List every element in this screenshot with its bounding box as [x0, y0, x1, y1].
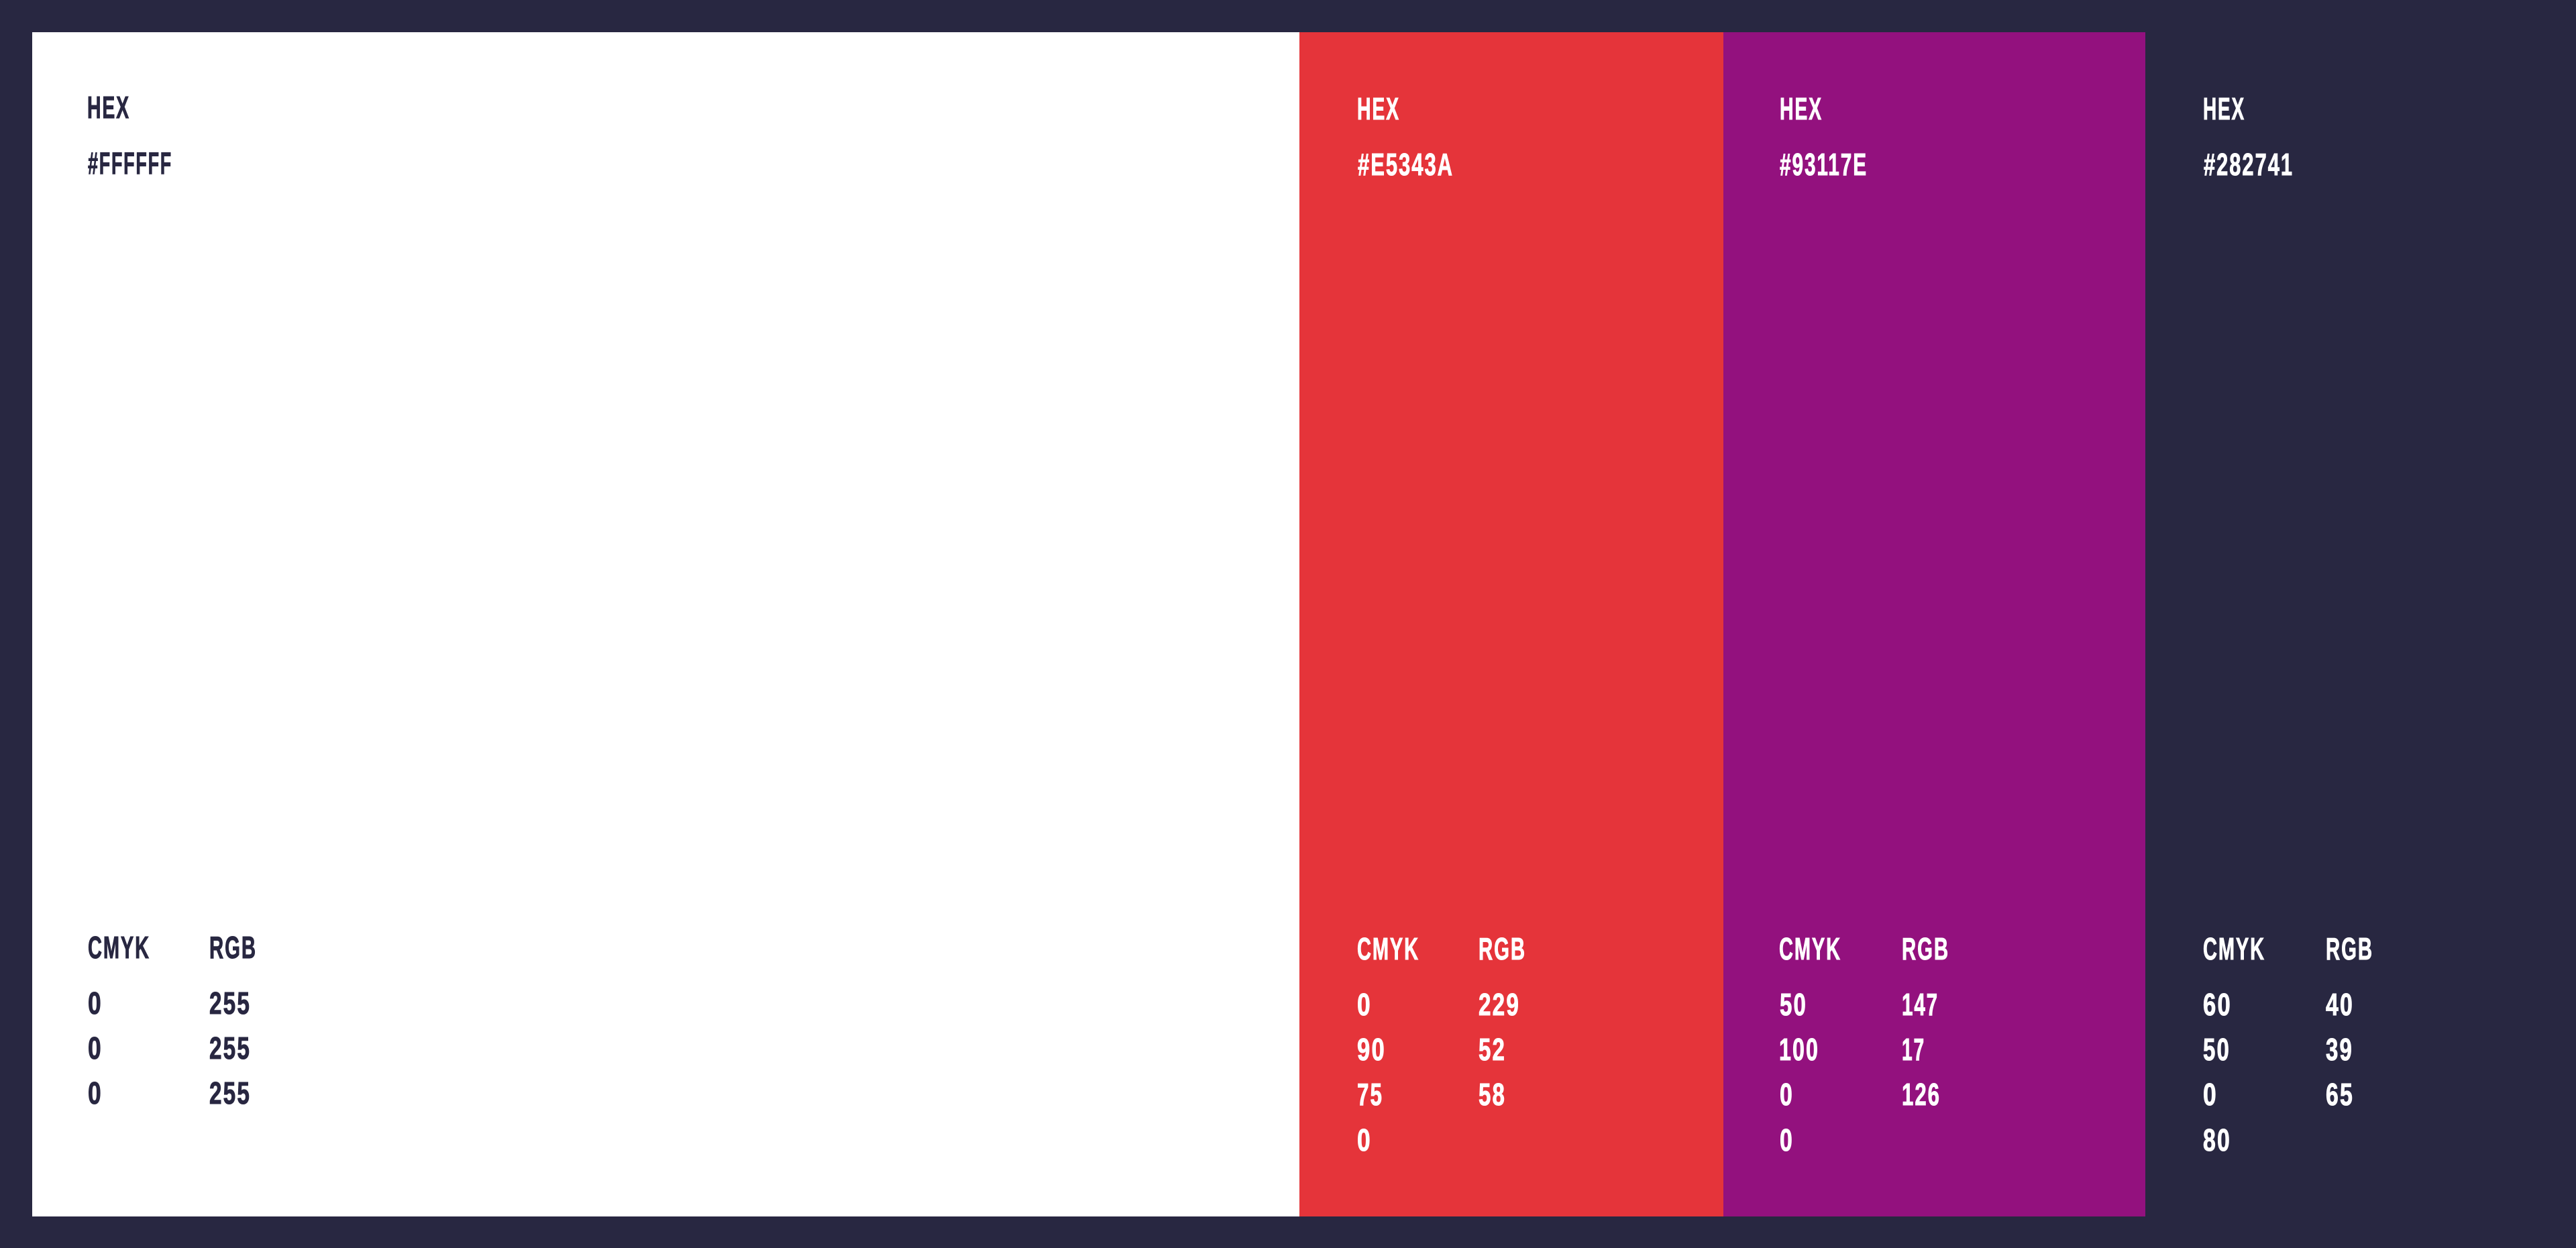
hex label and value: purple	[1780, 91, 1868, 182]
CMYK column: navy	[2203, 931, 2265, 1157]
hex label and value: white	[87, 90, 172, 180]
CMYK column: purple: 0	[1780, 1123, 1794, 1157]
RGB column: navy: 65	[2326, 1077, 2354, 1112]
CMYK column: white: 0	[88, 986, 103, 1021]
hex label and value: red: HEX	[1357, 91, 1400, 126]
RGB column: white: RGB	[209, 930, 257, 965]
CMYK column: white: 0	[88, 1076, 103, 1110]
CMYK column: navy: 50	[2203, 1032, 2231, 1067]
CMYK column: red	[1357, 931, 1419, 1157]
RGB column: navy: 39	[2326, 1032, 2353, 1067]
RGB column: red: 52	[1479, 1032, 1506, 1067]
CMYK column: navy: 80	[2203, 1123, 2231, 1157]
RGB column: white	[209, 930, 257, 1110]
RGB column: white: 255	[209, 1076, 251, 1110]
RGB column: navy: 40	[2326, 987, 2354, 1022]
RGB column: purple: 147	[1902, 987, 1939, 1022]
panel: purple swatch	[1723, 32, 2145, 1216]
CMYK column: purple: 0	[1780, 1077, 1794, 1112]
panel: white swatch	[32, 32, 1299, 1216]
RGB column: purple: 17	[1902, 1032, 1925, 1067]
CMYK column: navy: 60	[2203, 987, 2232, 1022]
RGB column: purple	[1902, 931, 1949, 1112]
hex label and value: white: HEX	[87, 90, 130, 125]
CMYK column: red: 90	[1357, 1032, 1386, 1067]
CMYK column: red: 0	[1357, 987, 1372, 1022]
hex label and value: red	[1357, 91, 1454, 182]
CMYK column: white: CMYK	[88, 930, 150, 965]
CMYK column: red: 0	[1357, 1123, 1372, 1157]
hex label and value: white: #FFFFFF	[88, 146, 172, 180]
RGB column: purple: 126	[1902, 1077, 1941, 1112]
RGB column: red: RGB	[1479, 931, 1526, 966]
CMYK column: purple: 50	[1780, 987, 1807, 1022]
panel: red swatch	[1299, 32, 1723, 1216]
CMYK column: navy: CMYK	[2203, 931, 2265, 966]
RGB column: red: 58	[1479, 1077, 1506, 1112]
CMYK column: navy: 0	[2203, 1077, 2218, 1112]
CMYK column: purple: CMYK	[1779, 931, 1841, 966]
CMYK column: purple	[1779, 931, 1841, 1157]
hex label and value: navy	[2203, 91, 2294, 182]
hex label and value: navy: #282741	[2204, 147, 2294, 182]
CMYK column: red: CMYK	[1357, 931, 1419, 966]
RGB column: navy: RGB	[2326, 931, 2373, 966]
hex label and value: purple: #93117E	[1780, 147, 1868, 182]
CMYK column: red: 75	[1357, 1077, 1383, 1112]
RGB column: white: 255	[209, 1031, 251, 1065]
hex label and value: red: #E5343A	[1358, 147, 1454, 182]
panel: navy swatch	[2145, 32, 2544, 1216]
hex label and value: purple: HEX	[1780, 91, 1823, 126]
RGB column: red: 229	[1479, 987, 1520, 1022]
RGB column: white: 255	[209, 986, 251, 1021]
CMYK column: white	[88, 930, 150, 1110]
CMYK column: purple: 100	[1779, 1032, 1819, 1067]
hex label and value: navy: HEX	[2203, 91, 2245, 126]
RGB column: purple: RGB	[1902, 931, 1949, 966]
CMYK column: white: 0	[88, 1031, 103, 1065]
RGB column: red	[1479, 931, 1526, 1112]
RGB column: navy	[2326, 931, 2373, 1112]
